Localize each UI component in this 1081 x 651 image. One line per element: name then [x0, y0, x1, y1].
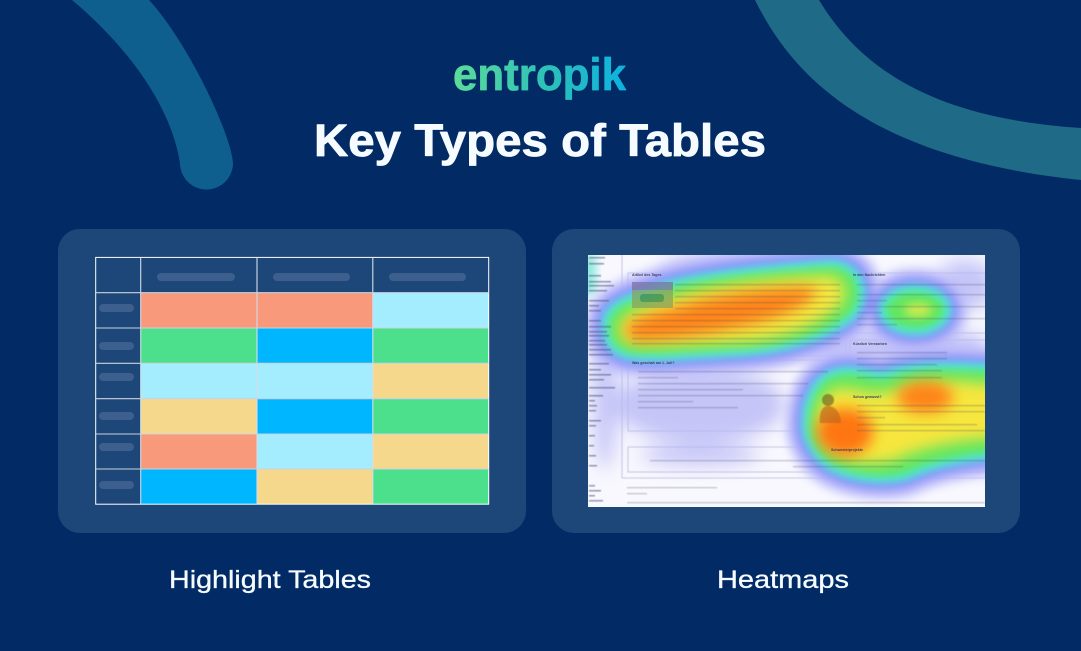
left edge heat strip — [588, 255, 602, 300]
heatmap: web page with attention overlay — [578, 250, 1008, 507]
thumbnail: portrait — [820, 394, 841, 423]
label: highlight tables: Highlight Tables — [169, 566, 371, 594]
row 3 cells — [141, 363, 489, 399]
row 1 cells — [141, 293, 489, 328]
page section frames — [622, 250, 1008, 478]
row 5 cells — [141, 434, 489, 469]
section headings: Schon gewusst? — [853, 395, 882, 399]
section headings: In den Nachrichten — [853, 273, 885, 277]
title: Key Types of Tables — [314, 115, 766, 166]
grid lines — [96, 257, 489, 504]
panel: heatmaps — [552, 229, 1020, 594]
yellow contour — [619, 276, 1000, 463]
decorative arc top left — [72, 0, 233, 190]
section headings: Schwesterprojekte — [831, 448, 863, 452]
row placeholder pills — [99, 304, 134, 489]
green contour — [610, 268, 1000, 475]
section headings: Was geschah am 1. Juli? — [632, 361, 674, 365]
thumbnail: article photo — [632, 282, 673, 308]
table: highlight table — [96, 257, 489, 504]
lavender attention haze — [593, 254, 995, 470]
decorative arc top right — [755, 0, 1081, 180]
header placeholder pills — [157, 273, 466, 281]
section headings — [632, 273, 887, 452]
body text lines — [627, 284, 987, 503]
orange hot spots — [626, 287, 953, 456]
small blob core — [904, 303, 932, 317]
row 2 cells — [141, 328, 489, 363]
row 4 cells — [141, 399, 489, 434]
panel: highlight tables — [58, 229, 526, 594]
row 6 cells — [141, 469, 489, 504]
lavender halo — [610, 268, 1000, 475]
blue contour — [610, 268, 1000, 475]
left navigation text — [589, 257, 615, 502]
cyan contour — [610, 268, 1000, 475]
label: heatmaps: Heatmaps — [717, 566, 849, 594]
section headings: Artikel des Tages — [632, 273, 662, 277]
section headings: Kürzlich Verstorben — [853, 342, 887, 346]
logo: entropik: entropik — [453, 49, 627, 100]
